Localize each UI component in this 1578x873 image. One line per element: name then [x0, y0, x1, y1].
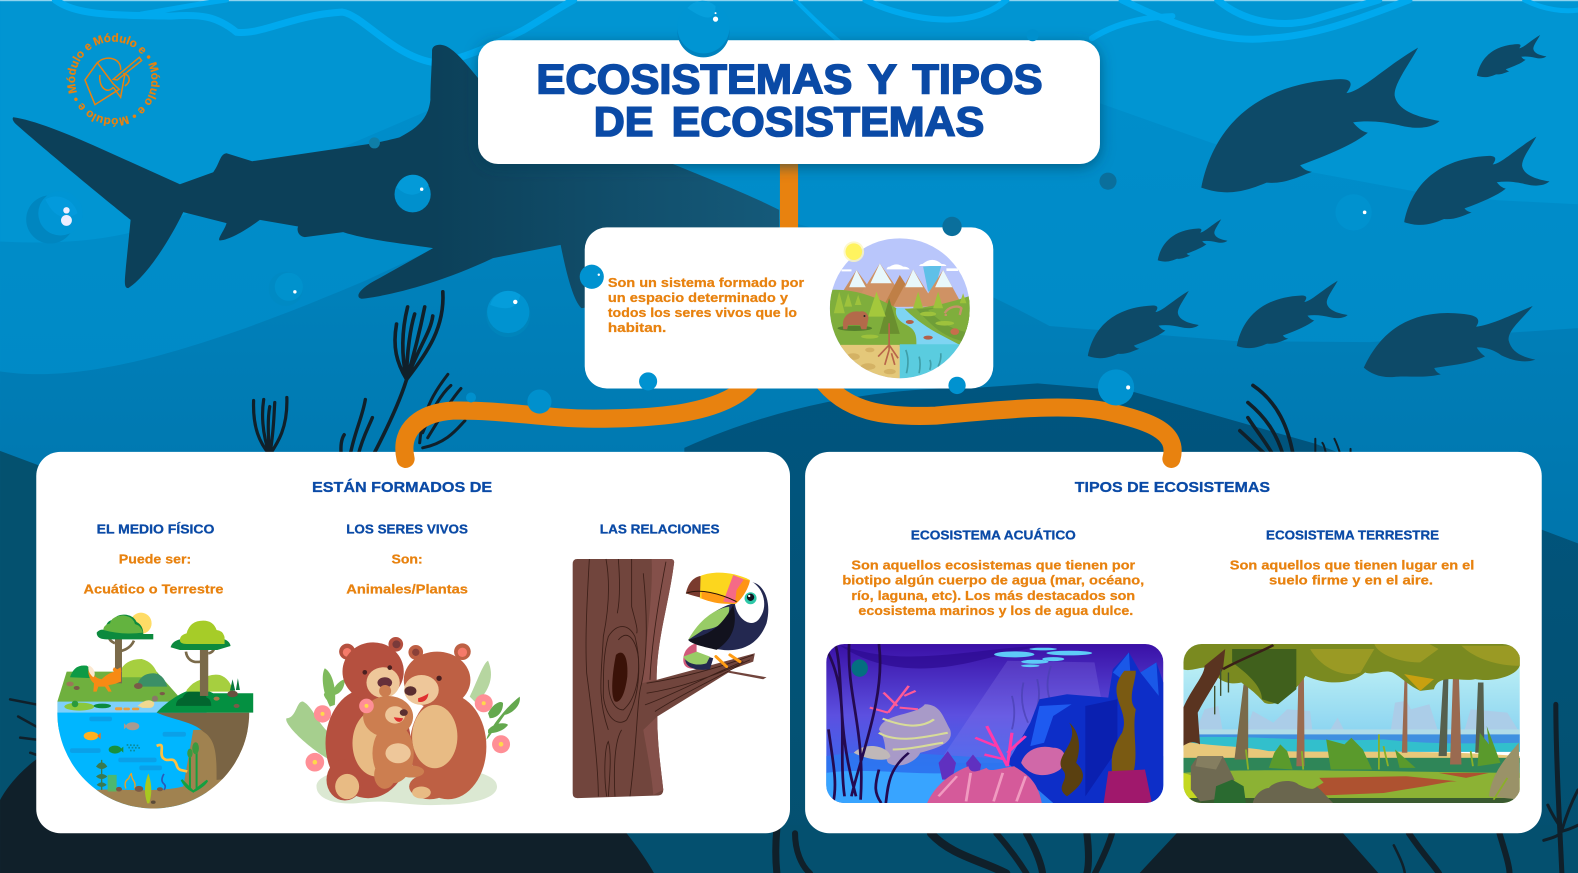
title text: ECOSISTEMAS Y TIPOS	[536, 57, 1043, 103]
definition text	[608, 275, 804, 335]
orange stem from title to definition	[780, 161, 798, 231]
seabed plants	[776, 704, 1578, 873]
bubble on right connector	[1098, 369, 1134, 406]
column: el medio físico: Puede ser:	[119, 552, 191, 567]
title card	[478, 40, 1100, 164]
column: el medio físico: EL MEDIO FÍSICO	[97, 521, 214, 536]
illustration: lake cross-section	[53, 613, 253, 813]
panel heading: TIPOS DE ECOSISTEMAS	[1075, 479, 1270, 496]
column: ecosistema terrestre: suelo firme y en el aire.	[1269, 573, 1433, 588]
illustration: underwater scene	[826, 644, 1163, 803]
bubble left large	[26, 191, 83, 244]
seaweed silhouettes	[10, 292, 1351, 755]
column: el medio físico: Acuático o Terrestre	[84, 582, 223, 597]
icon: book and pencil	[85, 57, 142, 105]
column: el medio físico	[84, 521, 223, 597]
column: ecosistema acuático: ECOSISTEMA ACUÁTICO	[911, 527, 1076, 542]
column: ecosistema acuático	[842, 527, 1144, 618]
illustration: forest and beach scene	[1183, 644, 1520, 803]
logo: Módulo e badge	[66, 33, 160, 127]
right panel: tipos de ecosistemas	[805, 452, 1542, 833]
definition text: Son un sistema formado por	[608, 275, 804, 290]
title text: DE ECOSISTEMAS	[594, 99, 984, 145]
illustration: bear family	[286, 637, 520, 805]
left adult bear	[325, 637, 411, 801]
column: ecosistema acuático: río, laguna, etc). Los más destacados son	[851, 588, 1135, 603]
definition text: habitan.	[608, 320, 666, 335]
definition text: un espacio determinado y	[608, 290, 789, 305]
bubble beside definition	[486, 291, 530, 337]
right adult bear	[404, 643, 486, 799]
shark silhouette	[13, 45, 779, 308]
column: ecosistema acuático: Son aquellos ecosistemas que tienen por	[851, 558, 1135, 573]
definition card	[585, 227, 993, 388]
bubble on shark	[395, 175, 431, 212]
column: los seres vivos: Animales/Plantas	[346, 582, 468, 597]
bear cub	[363, 685, 424, 789]
left panel: están formados de	[36, 452, 790, 833]
column: las relaciones: LAS RELACIONES	[600, 521, 720, 536]
column: los seres vivos: Son:	[391, 552, 423, 567]
column: ecosistema acuático: biotipo algún cuerpo de agua (mar, océano,	[842, 573, 1144, 588]
title text	[536, 57, 1043, 145]
column: ecosistema acuático: ecosistema marinos y los de agua dulce.	[858, 603, 1133, 618]
column: los seres vivos	[346, 521, 468, 597]
column: ecosistema terrestre: ECOSISTEMA TERRESTRE	[1266, 527, 1439, 542]
column: ecosistema terrestre	[1230, 527, 1474, 588]
dark seabed	[0, 750, 1379, 873]
ecosystem circle illustration	[827, 237, 973, 380]
illustration: toucan on tree	[573, 559, 768, 798]
column: los seres vivos: LOS SERES VIVOS	[346, 521, 468, 536]
panel heading: ESTÁN FORMADOS DE	[312, 479, 492, 496]
card edge bubbles	[580, 217, 966, 394]
top water waves	[55, 0, 1578, 62]
definition text: todos los seres vivos que lo	[608, 305, 797, 320]
orange connectors to panels	[404, 377, 1173, 459]
bubbles	[26, 1, 1372, 414]
small bubbles	[269, 29, 1372, 414]
bubble on title card	[677, 1, 730, 57]
column: ecosistema terrestre: Son aquellos que tienen lugar en el	[1230, 558, 1474, 573]
school of fish silhouettes	[1088, 35, 1549, 377]
